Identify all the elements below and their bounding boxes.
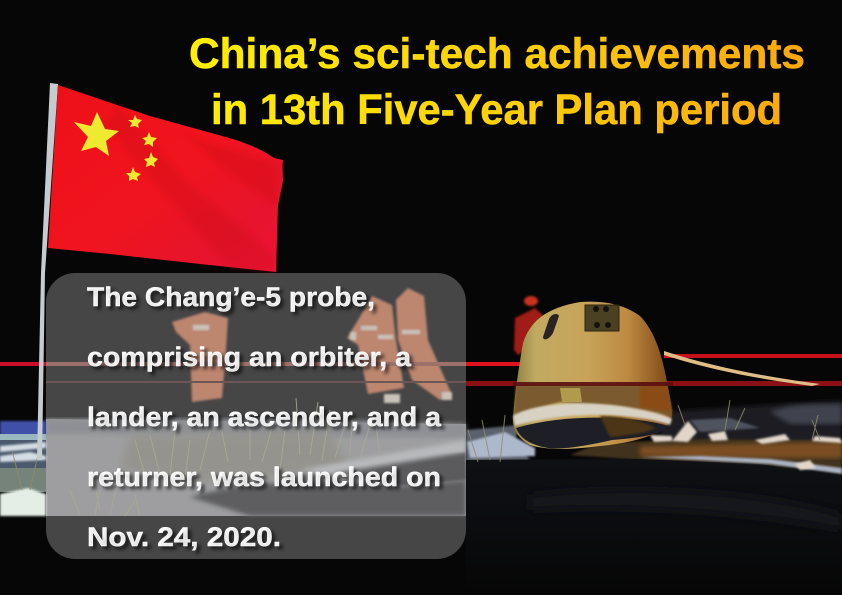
translucent text panel — [46, 273, 466, 559]
photo: worker behind capsule — [514, 296, 546, 355]
body text: comprising an orbiter, a — [87, 342, 412, 372]
snow strip left of the panel — [0, 421, 46, 436]
snow field behind the panel — [46, 419, 466, 516]
flag stars — [74, 112, 158, 181]
body text: Nov. 24, 2020. — [87, 522, 281, 552]
photo: return capsule — [513, 302, 673, 449]
photo: recovery workers — [172, 288, 452, 403]
capsule hatch — [585, 305, 619, 331]
photo: dry grass — [12, 398, 820, 516]
photo: red barrier tapes — [0, 351, 842, 386]
body text: returner, was launched on — [87, 462, 441, 492]
body text — [87, 282, 442, 552]
capsule window — [543, 314, 559, 339]
dark road — [466, 459, 842, 595]
title — [189, 30, 805, 134]
capsule heat shield — [516, 418, 668, 448]
flag — [48, 85, 283, 272]
body text: lander, an ascender, and a — [87, 402, 442, 432]
photo: ground and snow — [0, 400, 842, 595]
capsule rim — [513, 403, 672, 426]
title: in 13th Five-Year Plan period — [211, 86, 782, 134]
capsule scorch band — [514, 385, 672, 416]
snow and rubble right of the panel — [466, 425, 530, 462]
title: China’s sci-tech achievements — [189, 30, 805, 78]
body text: The Chang’e-5 probe, — [87, 282, 375, 312]
flag pole — [37, 83, 58, 460]
